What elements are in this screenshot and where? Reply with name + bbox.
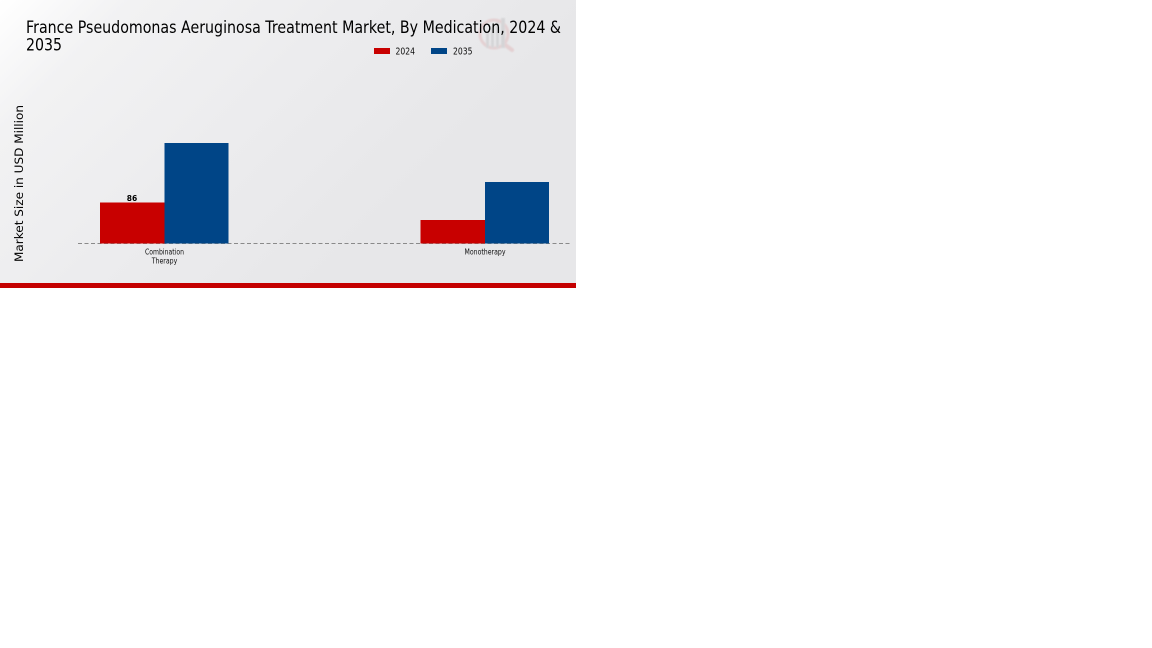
- bar: Monotherapy 2024: [420, 220, 485, 244]
- watermark logo: [480, 18, 512, 50]
- legend item: 2035: 2035: [453, 46, 472, 58]
- category label: Combination Therapy: Therapy: [151, 256, 177, 266]
- panel: chart background: [0, 0, 576, 283]
- group: Monotherapy: [420, 182, 549, 256]
- category label: Combination Therapy: [145, 248, 184, 266]
- category label: Monotherapy: Monotherapy: [464, 248, 506, 256]
- bar: Monotherapy 2035: [485, 182, 549, 244]
- bar: Combination Therapy 2024: [100, 202, 164, 244]
- title: [26, 18, 561, 54]
- legend: [374, 46, 472, 58]
- y-axis label: Market Size in USD Million: [12, 105, 26, 262]
- category label: Combination Therapy: Combination: [145, 248, 184, 256]
- legend item: 2024: 2024: [396, 46, 415, 58]
- value label: 86: 86: [127, 194, 137, 203]
- red footer bar: [0, 283, 576, 288]
- title: 2035: [26, 36, 62, 54]
- baseline: [78, 242, 572, 244]
- title: France Pseudomonas Aeruginosa Treatment Market, By Medication, 2024 &: [26, 18, 561, 37]
- bar chart: [100, 143, 549, 266]
- bar: Combination Therapy 2035: [164, 143, 228, 244]
- group: Combination Therapy: [100, 143, 228, 266]
